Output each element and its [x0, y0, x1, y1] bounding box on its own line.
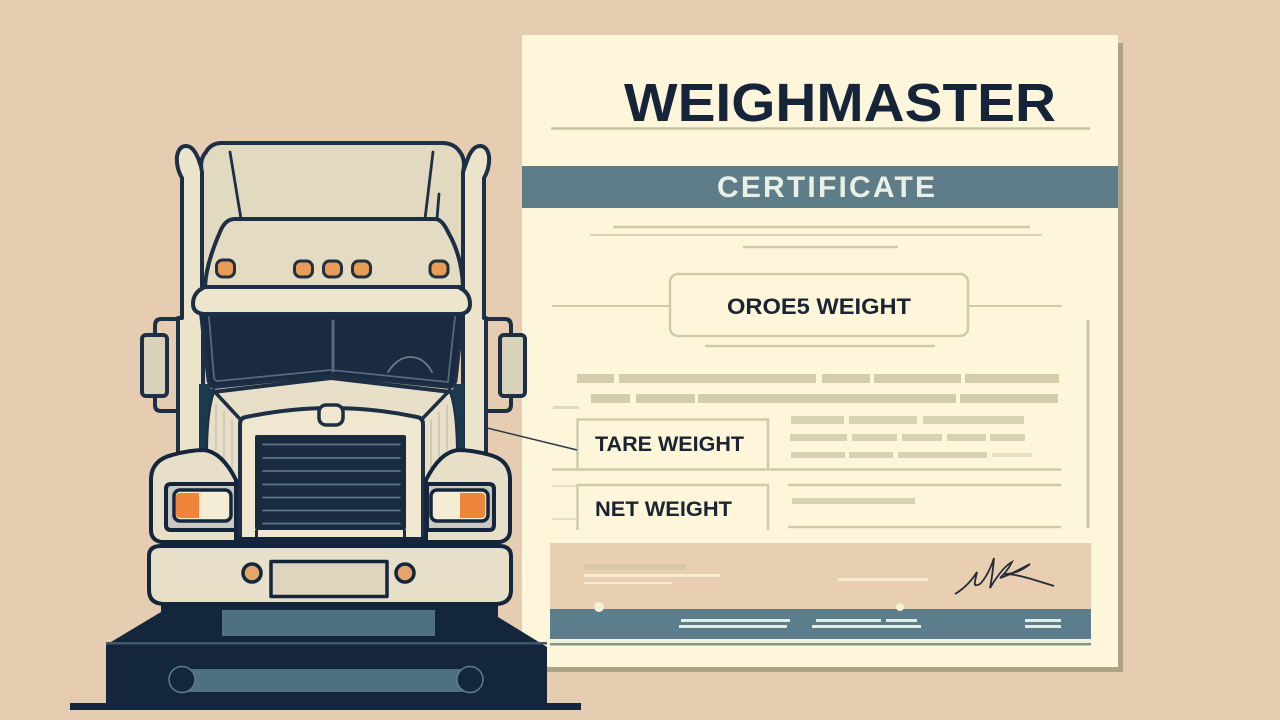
- trailer box: [201, 143, 464, 290]
- gross weight box: [670, 274, 968, 336]
- hood badge: [319, 405, 343, 425]
- net weight box: NET WEIGHT: [595, 498, 732, 521]
- signature panel: [550, 543, 1091, 609]
- certificate banner: [522, 166, 1118, 208]
- fender: left: [151, 450, 236, 542]
- footer band: [550, 602, 1091, 646]
- tare weight box: [578, 420, 768, 468]
- signature: [955, 558, 1054, 594]
- certificate banner: CERTIFICATE: [717, 171, 935, 204]
- hood: [199, 378, 464, 540]
- license plate: [271, 562, 387, 596]
- net weight box: [552, 485, 768, 530]
- exhaust stacks and side columns: [177, 146, 489, 455]
- placeholder text block: [553, 374, 1059, 409]
- tires: [161, 600, 498, 637]
- headlight: [166, 484, 236, 530]
- mirror: right: [486, 319, 525, 411]
- scale platform: [70, 600, 581, 710]
- callout line from truck to tare weight: [483, 427, 577, 450]
- marker lights: [216, 260, 448, 277]
- headlight: [427, 484, 494, 530]
- fender: right: [426, 450, 510, 542]
- grille: [233, 408, 429, 546]
- cab roof: [205, 219, 463, 287]
- mirror: left: [142, 319, 178, 411]
- sun visor: [193, 287, 470, 314]
- windshield: [201, 315, 463, 387]
- tare weight placeholder lines: [790, 416, 1032, 458]
- gross weight box: OROE5 WEIGHT: [727, 294, 912, 319]
- icon: truck on scale: [70, 143, 581, 710]
- bumper: [149, 546, 511, 604]
- title: WEIGHMASTER: [624, 73, 1056, 133]
- tare weight box: TARE WEIGHT: [595, 433, 744, 456]
- fog lights: [243, 564, 261, 582]
- panel: certificate document: [522, 35, 1123, 672]
